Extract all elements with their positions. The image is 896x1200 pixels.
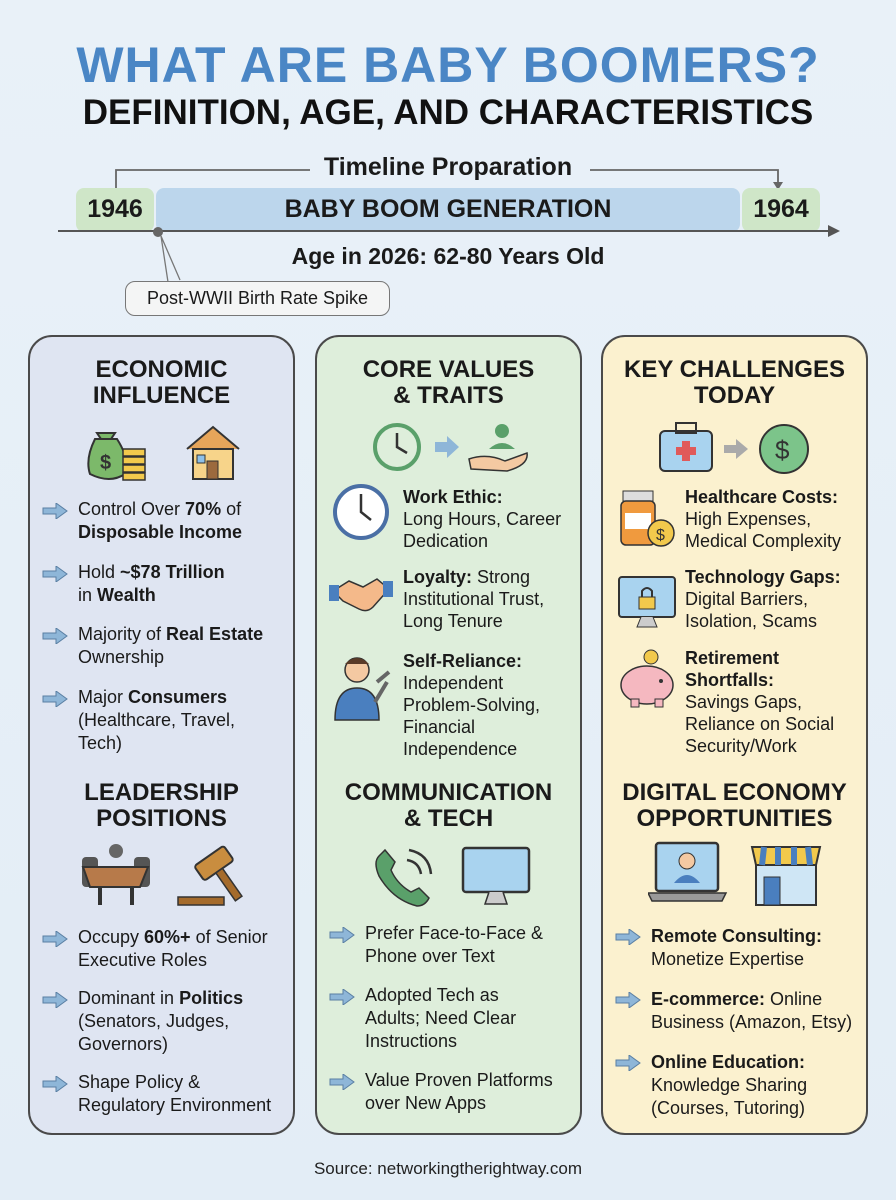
panel: challenges & opportunities: E-commerce: Online [651,989,822,1009]
panel: challenges & opportunities: Online Education: [651,1052,805,1072]
icons phone & monitor [375,846,530,907]
age text: Age in 2026: 62-80 Years Old [292,243,604,269]
panel: economic influence & leadership: (Healthcare, Travel, [78,710,235,730]
panel: core values & communication: Phone over Text [365,946,495,966]
icons money & house: $ [100,452,111,474]
panel: challenges & opportunities: Technology Gaps: [685,567,841,587]
panel: challenges & opportunities: Monetize Expertise [651,949,804,969]
heading leadership: LEADERSHIP [84,779,239,806]
panel: core values & communication: Independent [403,673,503,693]
heading economic [93,356,230,409]
heading core values [363,356,534,409]
heading challenges: TODAY [694,382,775,409]
timeline [58,153,840,316]
panel: economic influence & leadership: Executive Roles [78,950,207,970]
item healthcare [620,487,841,551]
panel: core values & communication [315,335,582,1135]
icons clock & hand [373,423,528,472]
timeline heading: Timeline Proparation [324,153,572,181]
heading economic: ECONOMIC [96,356,228,383]
panel: economic influence & leadership: Governors) [78,1034,168,1054]
panel: economic influence & leadership: Dominant in Politics [78,988,243,1008]
title: WHAT ARE BABY BOOMERS? [76,37,820,93]
panel: economic influence & leadership: Shape Policy & [78,1072,200,1092]
heading leadership [84,779,239,832]
panel: challenges & opportunities: Reliance on Social [685,714,834,734]
panel: core values & communication: Adopted Tech as [365,985,499,1005]
panel: challenges & opportunities: Remote Consulting: [651,926,822,946]
panel: economic influence & leadership: in Wealth [78,585,156,605]
callout [125,281,390,316]
generation bar label: BABY BOOM GENERATION [285,195,611,223]
panel: core values & communication: Loyalty: Strong [403,567,530,587]
heading communication: COMMUNICATION [345,779,552,806]
year 1964: 1964 [753,195,809,223]
heading opportunities: DIGITAL ECONOMY [622,779,847,806]
year 1946: 1946 [87,195,143,223]
panel: economic influence & leadership [28,335,295,1135]
panel: economic influence & leadership: Disposable Income [78,522,242,542]
panel: economic influence & leadership: Regulatory Environment [78,1095,271,1115]
panel: economic influence & leadership: Majority of Real Estate [78,624,263,644]
bullets economic [42,499,263,753]
icons money & house [87,426,240,481]
panel: challenges & opportunities: Security/Work [685,736,797,756]
item retirement [620,648,834,756]
panel: challenges & opportunities: Savings Gaps, [685,692,802,712]
panel: challenges & opportunities: $ [656,527,665,544]
heading opportunities [622,779,847,832]
panel: challenges & opportunities: Shortfalls: [685,670,774,690]
panel: economic influence & leadership: Ownership [78,647,164,667]
heading economic: INFLUENCE [93,382,230,409]
callout: Post-WWII Birth Rate Spike [147,288,368,308]
panel: economic influence & leadership: Control Over 70% of [78,499,241,519]
source: Source: networkingtherightway.com [314,1159,582,1178]
panel: challenges & opportunities [601,335,868,1135]
panel: challenges & opportunities: Business (Amazon, Etsy) [651,1012,852,1032]
icons medkit & dollar [659,422,809,474]
panel: core values & communication: Problem-Solving, [403,695,540,715]
panel: core values & communication: Work Ethic: [403,487,503,507]
panel: economic influence & leadership: Hold ~$78 Trillion [78,562,225,582]
icons medkit & dollar: $ [775,435,790,465]
panel: economic influence & leadership: Major Consumers [78,687,227,707]
panel: core values & communication: Institutional Trust, [403,589,544,609]
panel: core values & communication: over New Apps [365,1093,486,1113]
panel: core values & communication: Dedication [403,531,488,551]
panel: economic influence & leadership: (Senators, Judges, [78,1011,229,1031]
panel: core values & communication: Long Hours, Career [403,509,561,529]
panel: challenges & opportunities: Medical Complexity [685,531,841,551]
panel: economic influence & leadership: Tech) [78,733,122,753]
item self-reliance [334,651,540,759]
heading communication: & TECH [404,805,493,832]
icons laptop & store [648,842,822,906]
item technology [618,567,841,631]
subtitle: DEFINITION, AGE, AND CHARACTERISTICS [83,93,813,132]
heading core values: CORE VALUES [363,356,534,383]
panel: core values & communication: Instructions [365,1031,457,1051]
panel: challenges & opportunities: Isolation, Scams [685,611,817,631]
panel: challenges & opportunities: High Expenses, [685,509,811,529]
heading core values: & TRAITS [393,382,504,409]
panel: economic influence & leadership: Occupy 60%+ of Senior [78,927,268,947]
panel: challenges & opportunities: (Courses, Tutoring) [651,1098,805,1118]
panel: challenges & opportunities: Digital Barriers, [685,589,808,609]
item loyalty [329,567,544,631]
panel: core values & communication: Value Proven Platforms [365,1070,553,1090]
heading challenges [624,356,845,409]
panel: challenges & opportunities: Retirement [685,648,779,668]
heading communication [345,779,552,832]
icons table & gavel [82,844,243,906]
panel: challenges & opportunities: Healthcare Costs: [685,487,838,507]
bullets leadership [42,927,271,1115]
panel: challenges & opportunities: Knowledge Sharing [651,1075,807,1095]
item work ethic [333,484,561,551]
heading challenges: KEY CHALLENGES [624,356,845,383]
panel: core values & communication: Long Tenure [403,611,503,631]
bullets opportunities [616,926,852,1118]
panel: core values & communication: Adults; Need Clear [365,1008,516,1028]
bullets communication [330,923,553,1113]
heading opportunities: OPPORTUNITIES [636,805,833,832]
panel: core values & communication: Financial [403,717,475,737]
panel: core values & communication: Self-Reliance: [403,651,522,671]
heading leadership: POSITIONS [96,805,227,832]
panel: core values & communication: Independence [403,739,517,759]
panel: core values & communication: Prefer Face-to-Face & [365,923,543,943]
